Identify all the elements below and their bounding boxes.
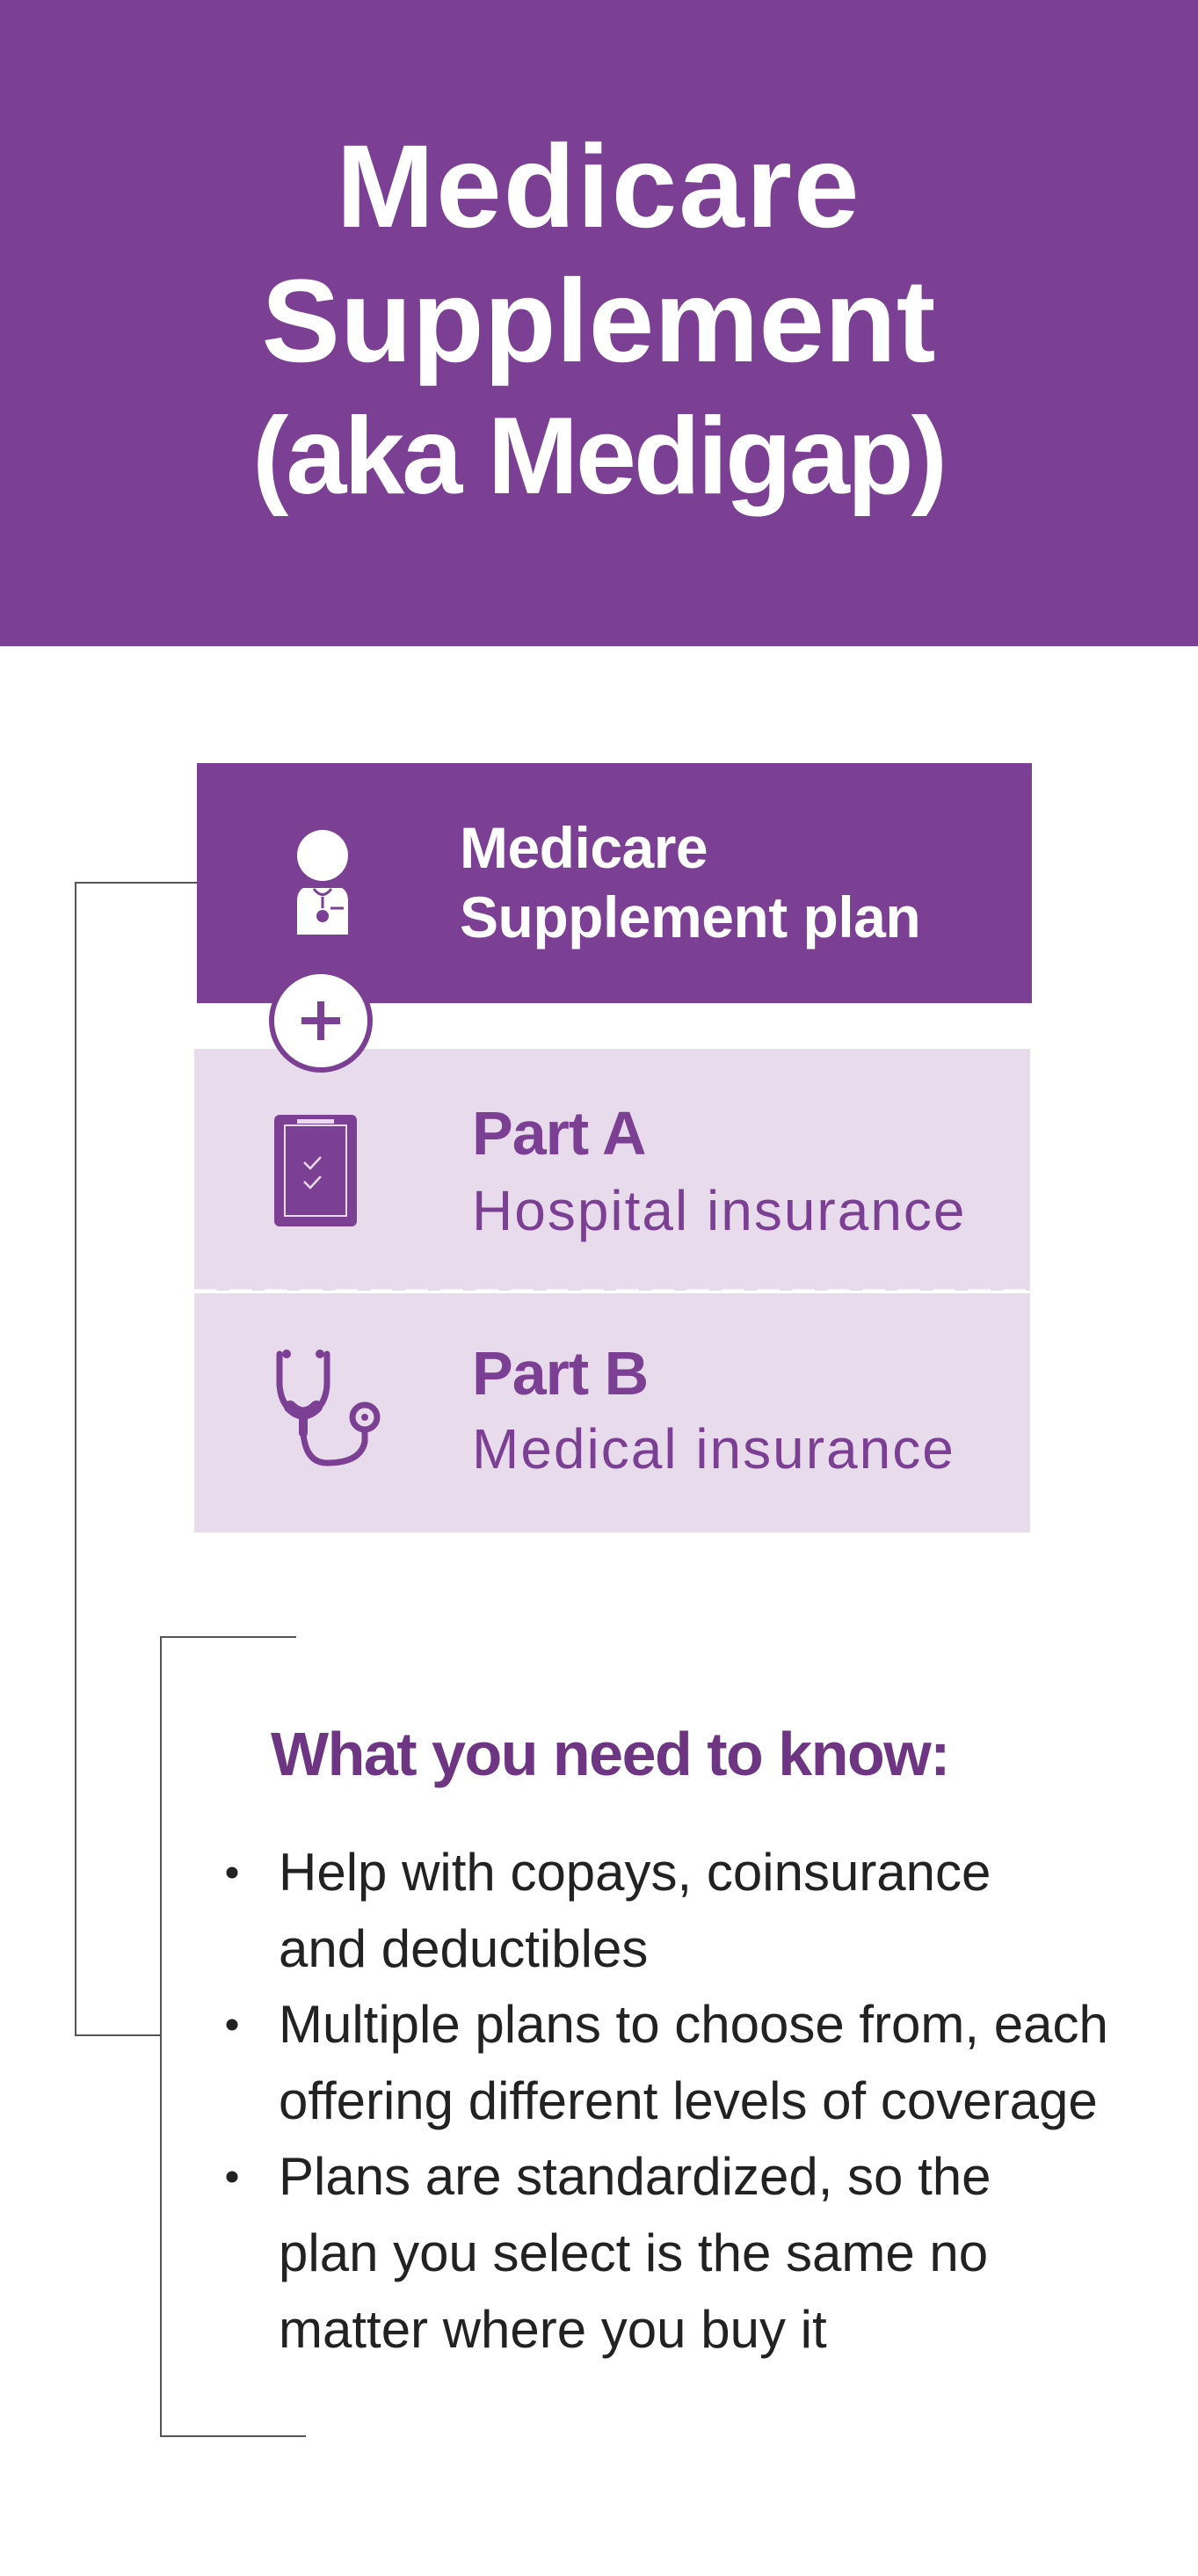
- bullet 3: [227, 2147, 991, 2359]
- icon: plus circle: [272, 971, 370, 1070]
- bullet 1: and deductibles: [279, 1919, 648, 1978]
- text: Part B: Medical insurance: [472, 1417, 955, 1481]
- heading: plan name: [460, 815, 920, 950]
- heading: plan name: Medicare: [460, 815, 708, 880]
- title: (aka Medigap): [252, 396, 945, 517]
- bullet 3: plan you select is the same no: [279, 2223, 988, 2282]
- title: Medicare: [337, 121, 860, 252]
- bullet 1: [227, 1843, 991, 1978]
- icon: clipboard: [274, 1115, 357, 1226]
- connector bracket: outer: [76, 883, 197, 2035]
- text: Part A: Part A: [472, 1099, 646, 1168]
- text: Part A: Hospital insurance: [472, 1179, 967, 1242]
- text: Part B: Part B: [472, 1339, 648, 1408]
- heading: plan name: Supplement plan: [460, 884, 920, 950]
- panel: Medicare Supplement plan: [197, 763, 1032, 1003]
- bullet 3: matter where you buy it: [279, 2300, 827, 2359]
- text: Part A: [472, 1099, 967, 1242]
- bullet list: [227, 1843, 1108, 2359]
- bullet 2: offering different levels of coverage: [279, 2071, 1098, 2130]
- bullet 2: [227, 1995, 1108, 2130]
- header banner: [0, 0, 1198, 646]
- panel: Part B: [194, 1293, 1030, 1532]
- divider dashed: [194, 1289, 1030, 1294]
- title: Supplement: [262, 256, 935, 387]
- bullet 2: Multiple plans to choose from, each: [279, 1995, 1108, 2054]
- icon: stethoscope: [280, 1350, 377, 1463]
- icon: doctor: [297, 830, 348, 935]
- heading: what you need to know: What you need to know:: [271, 1720, 949, 1788]
- text: Part B: [472, 1339, 955, 1481]
- connector bracket: inner: [161, 1637, 306, 2436]
- bullet 3: Plans are standardized, so the: [279, 2147, 991, 2206]
- panel: Part A: [194, 1049, 1030, 1291]
- title: [252, 121, 945, 517]
- bullet 1: Help with copays, coinsurance: [279, 1843, 991, 1902]
